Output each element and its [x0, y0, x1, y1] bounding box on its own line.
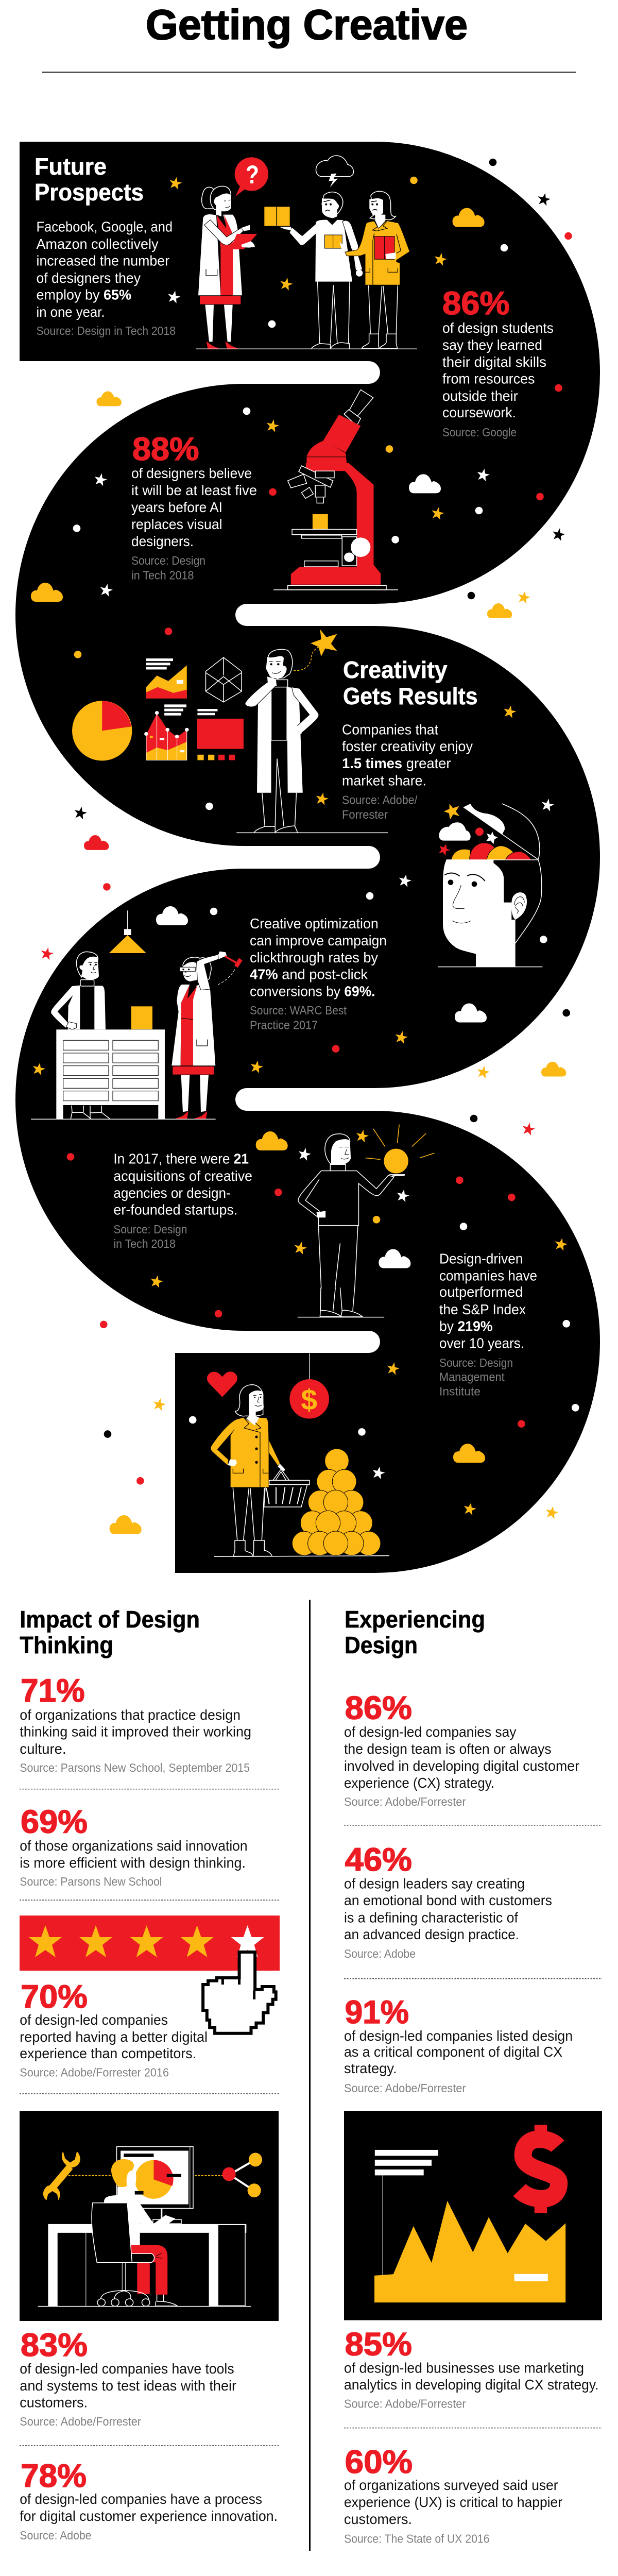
text: Creativity Gets Results: 1.5 times greater: [342, 755, 451, 771]
text: design-driven companies: the S&P Index: [439, 1301, 526, 1317]
heading: Experiencing: [345, 1606, 485, 1633]
title: Getting Creative: [146, 2, 468, 48]
stat: 60%: [344, 2444, 562, 2545]
stat: 86%: the design team is often or always: [344, 1741, 552, 1757]
heading: [20, 1606, 200, 1658]
text: Future Prospects: Prospects: [35, 179, 144, 206]
text: creative optimization: 47% and post-click: [250, 967, 368, 982]
text: creative optimization: Practice 2017: [250, 1018, 318, 1031]
text: design-driven companies: by 219%: [439, 1318, 493, 1334]
stat: 69%: Source: Parsons New School: [20, 1875, 162, 1888]
text: Creativity Gets Results: Creativity: [343, 656, 448, 683]
column divider: [309, 1600, 311, 2551]
text: creative optimization: Creative optimization: [250, 916, 379, 931]
stat: 70%: of design-led companies: [20, 2012, 168, 2028]
stat: 46%: Source: Adobe: [344, 1947, 416, 1960]
stat: 83%: Source: Adobe/Forrester: [20, 2415, 141, 2428]
stat: 70%: experience than competitors.: [20, 2045, 196, 2061]
stat: 91%: of design-led companies listed design: [344, 2028, 573, 2044]
stat: 88% of designers: replaces visual: [131, 516, 222, 532]
stat: 86%: experience (CX) strategy.: [344, 1775, 494, 1791]
text: Creativity Gets Results: market share.: [342, 773, 426, 788]
illustration: three colleagues with boxes: [196, 156, 417, 349]
text: design-driven companies: [439, 1251, 537, 1398]
stat: 83%: and systems to test ideas with their: [20, 2378, 236, 2394]
text: Future Prospects: [35, 153, 176, 337]
illustration: dollar sign and area chart: [344, 2111, 602, 2320]
stat: 69%: is more efficient with design thinking.: [20, 1855, 246, 1871]
stat: 70%: Source: Adobe/Forrester 2016: [20, 2066, 169, 2079]
panel: Impact of Design Thinking: [20, 1606, 280, 2542]
stat: 71%: 71%: [21, 1673, 84, 1709]
stat: 91%: 91%: [345, 1994, 409, 2030]
text: acquisitions: [113, 1151, 252, 1250]
stat: 60%: Source: The State of UX 2016: [344, 2532, 489, 2545]
text: Future Prospects: employ by 65%: [36, 286, 131, 303]
illustration: man holding light bulb: [298, 1125, 434, 1317]
stat: 85%: 85%: [345, 2327, 412, 2363]
text: creative optimization: clickthrough rates by: [250, 950, 378, 965]
stat: 86%: [344, 1690, 579, 1808]
stat: 86% of design students: from resources: [442, 371, 535, 386]
icon: pixel hand cursor: [203, 1952, 276, 2033]
stat: 86% of design students: their digital skills: [442, 354, 546, 370]
text: design-driven companies: companies have: [439, 1268, 537, 1284]
stat: 78%: of design-led companies have a process: [20, 2491, 262, 2507]
stat: 86% of design students: outside their: [442, 388, 518, 404]
stat: 91%: as a critical component of digital CX: [344, 2044, 562, 2060]
text: acquisitions: acquisitions of creative: [113, 1168, 252, 1184]
stat: 69%: 69%: [21, 1804, 88, 1840]
heading: Thinking: [20, 1632, 113, 1658]
stat: 46%: 46%: [345, 1842, 412, 1878]
text: acquisitions: In 2017, there were 21: [113, 1151, 249, 1167]
text: Future Prospects: Source: Design in Tech 2018: [36, 324, 176, 337]
scattered dots: [67, 159, 579, 1485]
stat: 83%: 83%: [21, 2327, 88, 2363]
text: design-driven companies: outperformed: [439, 1284, 523, 1300]
stat: 46%: an emotional bond with customers: [344, 1892, 552, 1908]
stat: 86% of design students: 86%: [442, 285, 510, 321]
text: creative optimization: [250, 916, 387, 1031]
stat: 60%: of organizations surveyed said user: [344, 2477, 558, 2493]
stat: 85%: Source: Adobe/Forrester: [344, 2397, 466, 2411]
stat: 78%: Source: Adobe: [20, 2529, 91, 2542]
stat: 85%: analytics in developing digital CX strategy.: [344, 2377, 598, 2393]
illustration: designer at desktop computer: [20, 2111, 279, 2321]
text: design-driven companies: over 10 years.: [439, 1335, 524, 1351]
text: Creativity Gets Results: foster creativity enjoy: [342, 738, 473, 754]
illustration: open head with ideas: [438, 804, 542, 967]
stat: 46%: is a defining characteristic of: [344, 1909, 518, 1926]
stat: 71%: Source: Parsons New School, September 2015: [20, 1761, 250, 1774]
stat: 70%: 70%: [21, 1979, 88, 2015]
illustration: lab scene with cabinet, man and woman: [31, 910, 243, 1119]
stat: 85%: [344, 2327, 598, 2411]
stat: 88% of designers: it will be at least five: [131, 482, 257, 498]
stat: 86%: Source: Adobe/Forrester: [344, 1795, 466, 1808]
scattered clouds: [31, 208, 566, 1534]
text: Creativity Gets Results: Companies that: [342, 721, 438, 738]
stat: 46%: [344, 1842, 552, 1960]
stat: 78%: [20, 2458, 278, 2542]
text: Future Prospects: Facebook, Google, and: [36, 218, 173, 235]
stat: 70%: reported having a better digital: [20, 2029, 208, 2045]
serpentine black panel: [15, 142, 600, 1573]
stat: 70%: [20, 1979, 208, 2079]
text: Future Prospects: of designers they: [36, 270, 141, 286]
stat: 71%: [20, 1673, 251, 1774]
illustration: three colleagues with boxes: ?: [246, 160, 259, 189]
stat: 60%: 60%: [345, 2444, 413, 2480]
stat: 86% of design students: coursework.: [442, 404, 516, 420]
stat: 88% of designers: 88%: [132, 431, 199, 467]
stat: 88% of designers: years before AI: [131, 499, 222, 515]
text: design-driven companies: Design-driven: [439, 1251, 523, 1267]
text: design-driven companies: Management: [439, 1370, 505, 1384]
stat: 78%: for digital customer experience innovation.: [20, 2508, 278, 2524]
stat: 78%: 78%: [21, 2458, 87, 2494]
stat: 46%: of design leaders say creating: [344, 1875, 525, 1892]
text: Creativity Gets Results: [342, 656, 478, 821]
stat: 60%: customers.: [344, 2511, 412, 2527]
stat: 71%: thinking said it improved their working: [20, 1724, 251, 1739]
heading: Design: [345, 1632, 418, 1658]
stat: 85%: of design-led businesses use marketing: [344, 2360, 584, 2376]
text: Creativity Gets Results: Source: Adobe/: [342, 793, 418, 807]
stat: 86% of design students: of design students: [442, 320, 554, 336]
stat: 88% of designers: designers.: [131, 533, 194, 549]
text: Future Prospects: Future: [35, 153, 107, 180]
text: acquisitions: Source: Design: [113, 1223, 187, 1236]
stat: 69%: of those organizations said innovation: [20, 1838, 248, 1854]
stat: 71%: culture.: [20, 1741, 66, 1757]
stat: 91%: Source: Adobe/Forrester: [344, 2081, 466, 2095]
stat: 91%: [344, 1994, 573, 2095]
stat: 60%: experience (UX) is critical to happier: [344, 2494, 562, 2510]
stat: 88% of designers: of designers believe: [131, 465, 252, 481]
text: creative optimization: conversions by 69%.: [250, 984, 375, 999]
stat: 83%: of design-led companies have tools: [20, 2361, 234, 2377]
stat: 86% of design students: say they learned: [442, 337, 542, 353]
text: Future Prospects: Amazon collectively: [36, 236, 159, 252]
heading: [345, 1606, 485, 1658]
text: Creativity Gets Results: Forrester: [342, 808, 388, 821]
text: Creativity Gets Results: Gets Results: [343, 683, 478, 709]
text: Future Prospects: in one year.: [36, 304, 105, 320]
stat: 86%: of design-led companies say: [344, 1724, 516, 1740]
star rating bar: [20, 1916, 280, 1971]
text: Future Prospects: increased the number: [36, 252, 169, 269]
panel: Experiencing Design: [344, 1606, 602, 2545]
stat: 86%: 86%: [345, 1690, 412, 1726]
heading: Impact of Design: [20, 1606, 200, 1633]
illustration: shopper with basket and coins: [207, 1353, 389, 1556]
stat: 83%: customers.: [20, 2394, 88, 2410]
stat: 91%: strategy.: [344, 2060, 397, 2076]
stat: 88% of designers: in Tech 2018: [131, 569, 194, 582]
text: acquisitions: er-founded startups.: [113, 1202, 237, 1218]
scattered stars: [31, 176, 569, 1519]
text: design-driven companies: Source: Design: [439, 1356, 513, 1369]
text: creative optimization: Source: WARC Best: [250, 1004, 347, 1017]
stat: 88% of designers: Source: Design: [131, 554, 205, 567]
stat: 86%: involved in developing digital customer: [344, 1758, 579, 1774]
text: acquisitions: in Tech 2018: [113, 1237, 176, 1250]
stat: 69%: [20, 1804, 248, 1888]
text: design-driven companies: Institute: [439, 1385, 480, 1398]
stat: 71%: of organizations that practice design: [20, 1707, 241, 1723]
stat: 46%: an advanced design practice.: [344, 1926, 519, 1942]
illustration: charts and thinking man: [72, 629, 388, 833]
stat: 88% of designers: [131, 431, 257, 582]
illustration: microscope: [273, 390, 398, 590]
stat: 83%: [20, 2327, 236, 2428]
stat: 86% of design students: [442, 285, 554, 439]
text: creative optimization: can improve campaign: [250, 933, 387, 948]
text: acquisitions: agencies or design-: [113, 1185, 231, 1201]
illustration: shopper with basket and coins: $: [301, 1384, 317, 1417]
stat: 86% of design students: Source: Google: [442, 426, 517, 439]
